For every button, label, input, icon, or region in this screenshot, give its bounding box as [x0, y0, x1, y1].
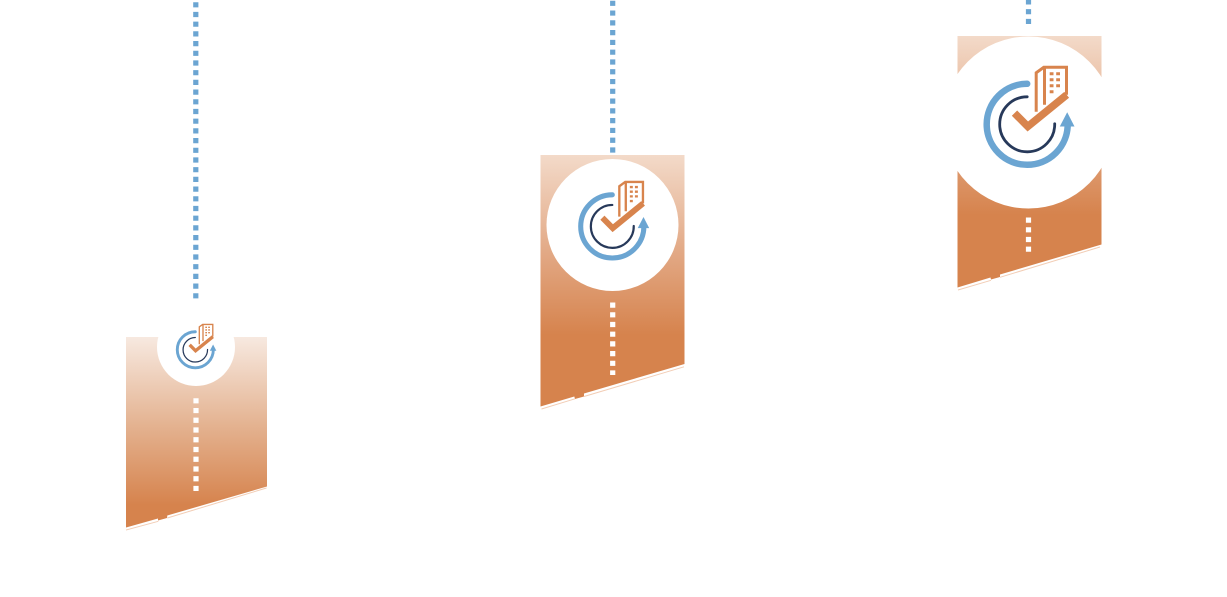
panel: right banner	[942, 0, 1114, 290]
connector: right white dotted line	[1026, 218, 1031, 252]
connector: middle white dotted line	[610, 302, 615, 375]
icon: left building check cycle	[177, 324, 216, 368]
banner: middle gradient shape	[540, 155, 684, 406]
circle: right white badge	[942, 36, 1114, 208]
connector: middle blue dotted line	[610, 1, 615, 153]
edge: middle banner bottom highlight	[542, 367, 684, 409]
circle: left white badge	[157, 308, 235, 386]
icon: right building check cycle	[987, 67, 1074, 165]
connector: left white dotted line	[193, 398, 199, 491]
circle: middle white badge	[546, 159, 678, 291]
edge: right banner bottom highlight	[958, 247, 1100, 290]
connector: left blue dotted line	[193, 2, 198, 299]
panel: left banner	[126, 2, 267, 530]
panel: middle banner	[540, 1, 684, 409]
banner: right gradient shape	[958, 36, 1102, 288]
edge: left banner bottom highlight	[126, 488, 266, 530]
banner: left gradient shape	[126, 337, 267, 528]
connector: right blue dotted line	[1026, 0, 1031, 25]
icon: middle building check cycle	[581, 182, 649, 258]
